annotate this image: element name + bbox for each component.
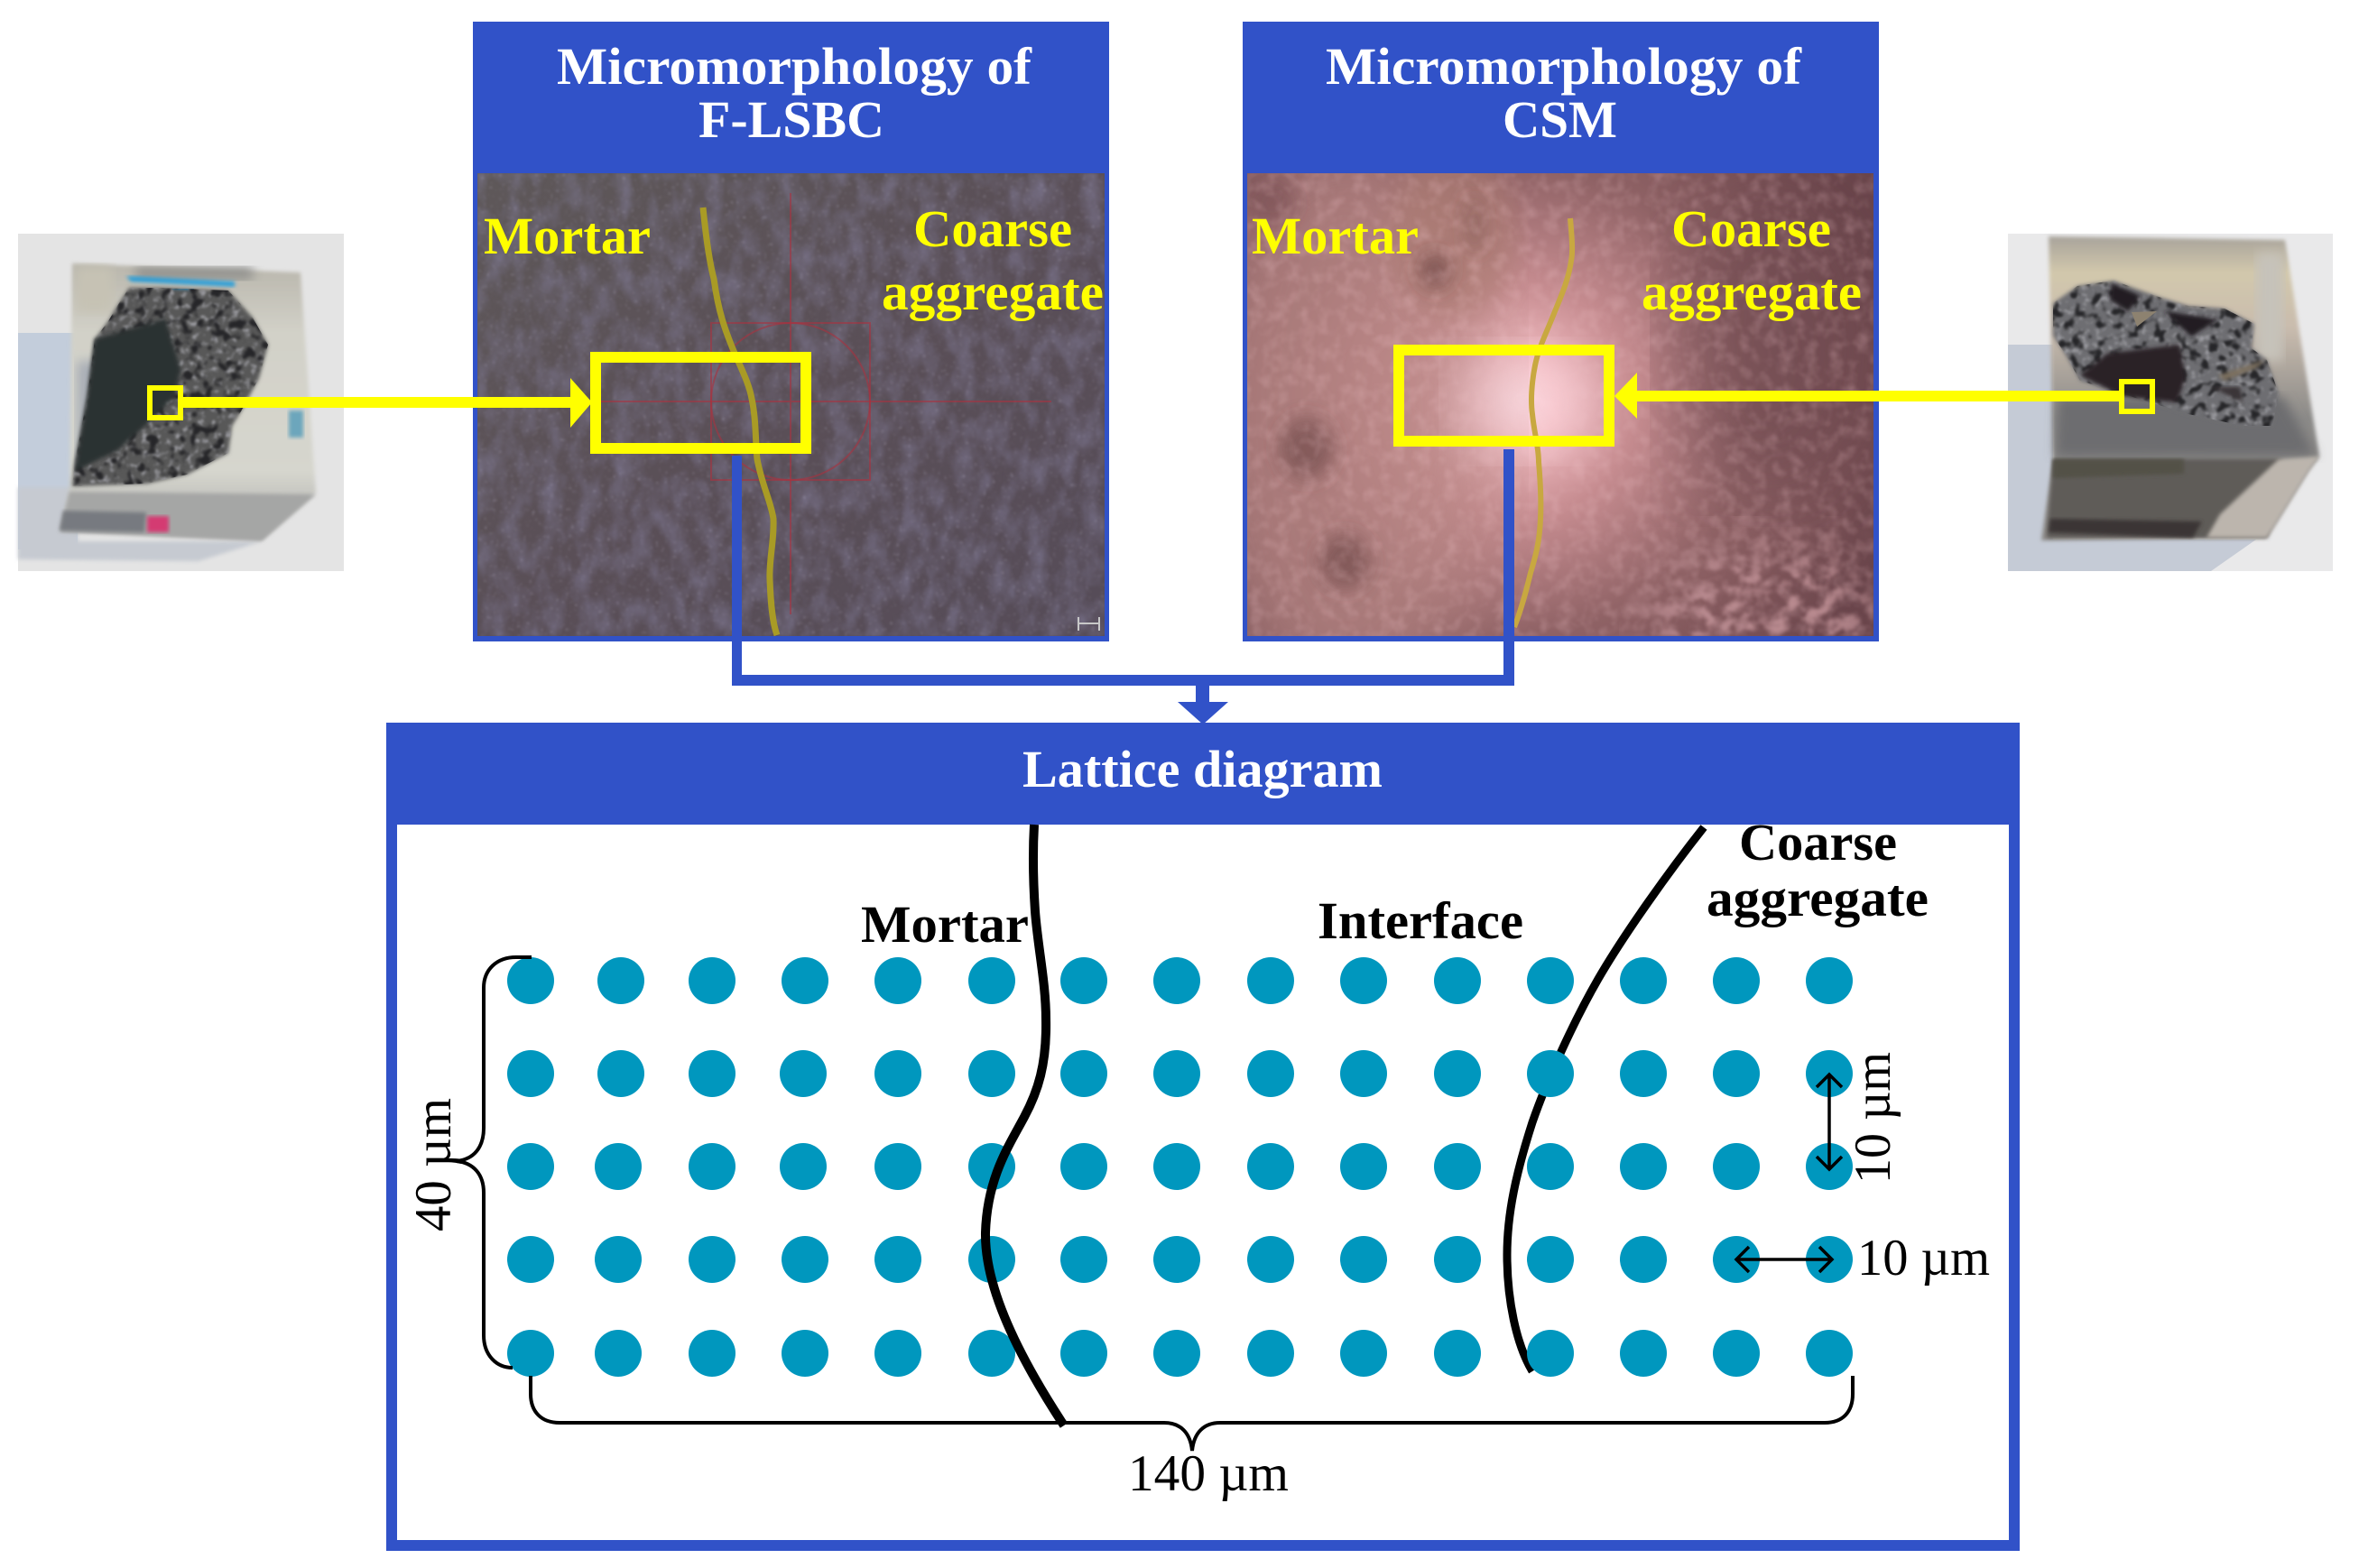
sub: bracket 140 um — [531, 1376, 1853, 1451]
arrow: CSM specimen to micrograph — [1399, 350, 2152, 441]
sub: label coarse aggregate: Coarse — [1671, 199, 1831, 258]
sub: bracket 40 um — [457, 957, 532, 1368]
sub: interface boundary mortar side — [985, 825, 1064, 1425]
sub: panel title — [557, 37, 1032, 149]
connector: micrographs to lattice diagram — [732, 449, 1514, 724]
sub: spacing arrow vertical — [1817, 1075, 1842, 1169]
photo: CSM specimen in resin — [2008, 234, 2333, 571]
sub: spacing arrow horizontal — [1736, 1247, 1832, 1272]
sub: panel title: F-LSBC — [698, 90, 884, 149]
sub: label coarse aggregate: aggregate — [882, 263, 1104, 321]
sub: label mortar: Mortar — [861, 895, 1029, 954]
sub: rock fragment — [2053, 281, 2279, 426]
sub: label coarse aggregate: Coarse — [1739, 813, 1897, 872]
sub: panel title: Lattice diagram — [1022, 740, 1383, 798]
sub: label coarse aggregate: aggregate — [1707, 869, 1929, 927]
sub: panel title: Micromorphology of — [557, 37, 1032, 96]
sub: interface curve — [703, 208, 777, 635]
sub: interface curve — [1514, 218, 1572, 627]
sub: dots over boundary — [1527, 1050, 1574, 1377]
sub: rock fragment — [72, 288, 268, 486]
sub: microscope image F-LSBC — [477, 173, 1105, 636]
sub: label mortar: Mortar — [1252, 207, 1419, 265]
sub: panel title: Micromorphology of — [1326, 37, 1802, 96]
sub: interface boundary aggregate side — [1507, 827, 1704, 1371]
sub: panel title: CSM — [1503, 90, 1617, 149]
panel: micromorphology of CSM — [1243, 22, 1879, 641]
sub: microscope image CSM — [1247, 173, 1873, 636]
sub: dot grid — [507, 957, 1853, 1377]
sub: label 10 um vertical: 10 µm — [1845, 1052, 1901, 1184]
arrow: F-LSBC specimen to micrograph — [150, 357, 806, 448]
sub: label 40 um: 40 µm — [405, 1098, 462, 1231]
sub: label 10 um horizontal: 10 µm — [1857, 1230, 1990, 1287]
sub: label coarse aggregate: Coarse — [913, 199, 1072, 258]
sub: panel title — [1326, 37, 1802, 149]
sub: label coarse aggregate — [882, 199, 1104, 321]
photo: F-LSBC specimen in resin — [18, 234, 344, 571]
panel: micromorphology of F-LSBC — [473, 22, 1109, 641]
sub: label coarse aggregate — [1707, 813, 1929, 927]
sub: label mortar: Mortar — [484, 207, 651, 265]
sub: label coarse aggregate: aggregate — [1642, 263, 1862, 321]
panel: lattice diagram — [386, 723, 2020, 1545]
sub: label interface: Interface — [1318, 891, 1523, 950]
sub: label 140 um: 140 µm — [1128, 1445, 1289, 1502]
sub: label coarse aggregate — [1642, 199, 1862, 321]
